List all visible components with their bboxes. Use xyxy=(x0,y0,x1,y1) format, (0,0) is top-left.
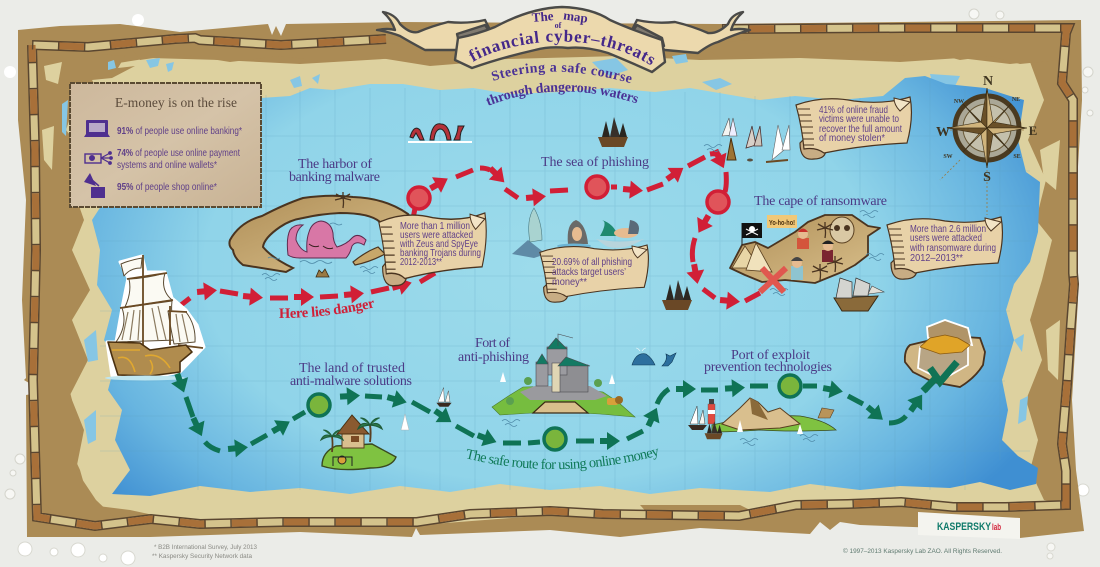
compass star xyxy=(947,88,1027,168)
wharf xyxy=(533,402,588,413)
reclining mermaid xyxy=(596,220,644,248)
ship sails xyxy=(116,255,203,348)
small boats xyxy=(401,388,452,430)
whale xyxy=(632,348,676,366)
check mark xyxy=(923,362,957,391)
heading: the harbor of banking malware xyxy=(289,157,380,185)
compass letters: NW xyxy=(954,99,964,105)
island: port of exploit prevention xyxy=(688,398,836,446)
mermaid in water xyxy=(557,220,591,248)
heading: fort of anti-phishing xyxy=(458,336,529,365)
icon: gramophone and basket xyxy=(84,173,105,198)
lighthouse xyxy=(708,399,715,424)
title banner xyxy=(376,6,752,106)
heading: land of trusted anti-malware solutions: The land of trusted xyxy=(299,361,405,376)
heading: the cape of ransomware: The cape of ransomware xyxy=(754,194,887,209)
callout: fraud victims stat: recover the full amount xyxy=(819,123,902,135)
heading: the harbor of banking malware: banking malware xyxy=(289,170,380,185)
heading: land of trusted anti-malware solutions: anti-malware solutions xyxy=(290,374,412,389)
light blue splashes on parchment xyxy=(62,54,1028,444)
callout: ransomware stat: 2012–2013** xyxy=(910,252,963,264)
cape mountains xyxy=(732,243,772,272)
trees xyxy=(506,377,602,405)
callout: fraud victims stat xyxy=(796,97,911,159)
pirate flag xyxy=(742,223,762,245)
ship hull xyxy=(108,342,192,376)
callout: banking malware stat: 2012-2013** xyxy=(400,256,442,268)
compass rose xyxy=(936,74,1037,215)
label: the safe route: The safe route for using online money xyxy=(467,448,658,472)
ship xyxy=(105,255,204,380)
dashes xyxy=(176,154,760,309)
red danger route xyxy=(176,146,760,311)
stat: online banking: 91% of people use online banking* xyxy=(117,125,242,137)
island: cape of ransomware xyxy=(730,210,884,296)
callout: banking malware stat: banking Trojans during xyxy=(400,247,481,259)
ship halo xyxy=(107,256,204,378)
waypoints xyxy=(408,176,729,213)
stat: online shopping: 95% of people shop online* xyxy=(117,181,217,193)
stat: online payment: 74% of people use online payment xyxy=(117,147,240,159)
banner ribbon xyxy=(377,7,750,72)
Kaspersky logo: lab xyxy=(992,522,1001,532)
callout: phishing stat: 20.69% of all phishing xyxy=(552,256,632,268)
arrows xyxy=(196,146,741,311)
heading: the harbor of banking malware: The harbor of xyxy=(298,157,372,172)
icon: payment network xyxy=(85,152,112,164)
stat: online payment xyxy=(117,147,240,171)
compass letters: E xyxy=(1029,123,1037,138)
heading: the sea of phishing: The sea of phishing xyxy=(541,155,649,170)
castle xyxy=(536,334,590,392)
title text xyxy=(469,7,654,65)
heading: fort of anti-phishing: anti-phishing xyxy=(458,350,529,365)
callout: fraud victims stat: victims were unable to xyxy=(819,113,899,125)
wrecked sailing ships xyxy=(704,118,790,162)
island: harbor of banking malware xyxy=(229,192,418,280)
stat: online payment: systems and online wallets* xyxy=(117,159,217,171)
sea xyxy=(92,76,1040,496)
callout: ransomware stat: users were attacked xyxy=(910,232,982,244)
small rocks xyxy=(316,269,329,277)
compass letters xyxy=(936,74,1037,185)
heading: port of exploit prevention technologies: Port of exploit xyxy=(731,348,810,363)
chest lid xyxy=(927,320,972,345)
arrows xyxy=(169,371,930,458)
title text: The xyxy=(531,8,554,25)
mermaids xyxy=(512,208,644,258)
ghost ship xyxy=(598,117,628,147)
pirate ship near cape xyxy=(834,278,884,311)
dashes xyxy=(186,384,931,451)
title text: of xyxy=(555,21,562,30)
panel: E-money is on the rise xyxy=(70,83,261,207)
label: here lies danger xyxy=(279,300,374,318)
callout: banking malware stat: More than 1 million xyxy=(400,220,470,232)
callout: ransomware stat xyxy=(887,217,1002,279)
heading: fort of anti-phishing: Fort of xyxy=(475,336,510,351)
pirates xyxy=(791,228,834,280)
callout: ransomware stat: with ransomware during xyxy=(909,242,996,254)
Kaspersky logo xyxy=(918,512,1020,539)
waypoints xyxy=(308,375,801,450)
black ship xyxy=(662,280,692,310)
callout: phishing stat xyxy=(540,245,648,302)
speech tag: yo-ho-ho: Yo-ho-ho! xyxy=(769,220,795,227)
fort island xyxy=(492,334,635,426)
callout: fraud victims stat: of money stolen* xyxy=(819,132,885,144)
green safe route xyxy=(169,371,931,458)
Kaspersky logo: KASPERSKY xyxy=(937,521,992,533)
panel heading: E-money is on the rise xyxy=(115,95,237,110)
icon: laptop xyxy=(84,120,110,137)
callout: banking malware stat: users were attacked xyxy=(400,229,473,241)
lion xyxy=(607,396,623,405)
red X mark xyxy=(760,268,786,292)
heading: land of trusted anti-malware solutions xyxy=(290,361,412,389)
copyright: © 1997–2013 Kaspersky Lab ZAO. All Rights Reserved. xyxy=(843,547,1002,555)
spider xyxy=(333,456,352,466)
callout: banking malware stat: with Zeus and SpyEye xyxy=(399,238,478,250)
compass letters: W xyxy=(936,125,950,140)
callout: ransomware stat: More than 2.6 million xyxy=(910,223,986,235)
subtitle: Steering a safe course xyxy=(492,63,632,83)
footnotes: ** Kaspersky Security Network data xyxy=(152,553,252,560)
sea serpent xyxy=(408,124,472,142)
footnotes: * B2B International Survey, July 2013 xyxy=(154,544,257,551)
compass letters: S xyxy=(983,170,991,185)
footnotes xyxy=(152,544,257,560)
treasure chest xyxy=(905,320,985,391)
title text: map xyxy=(562,7,589,26)
callout: banking malware stat xyxy=(379,213,486,286)
mermaid on rock xyxy=(512,208,546,258)
skull xyxy=(830,217,854,243)
subtitle xyxy=(486,63,638,106)
label: here lies danger: Here lies danger xyxy=(279,300,374,318)
chest body xyxy=(918,347,968,380)
heading: port of exploit prevention technologies xyxy=(704,348,832,375)
speech tag: yo-ho-ho xyxy=(767,215,797,228)
callout: phishing stat: money** xyxy=(552,276,587,288)
subtitle: through dangerous waters xyxy=(486,82,638,106)
treasure xyxy=(920,335,970,354)
title text: financial cyber–threats xyxy=(469,30,654,65)
island: anti-malware hut xyxy=(321,415,396,470)
compass letters: N xyxy=(983,74,993,89)
callout: fraud victims stat: 41% of online fraud xyxy=(819,104,888,116)
compass letters: SE xyxy=(1013,154,1021,160)
octopus xyxy=(287,221,366,258)
compass letters: NE xyxy=(1012,97,1020,103)
sand island xyxy=(905,336,985,387)
heading: port of exploit prevention technologies: prevention technologies xyxy=(704,360,832,375)
compass letters: SW xyxy=(943,154,953,160)
callout: phishing stat: attacks target users’ xyxy=(552,266,626,278)
